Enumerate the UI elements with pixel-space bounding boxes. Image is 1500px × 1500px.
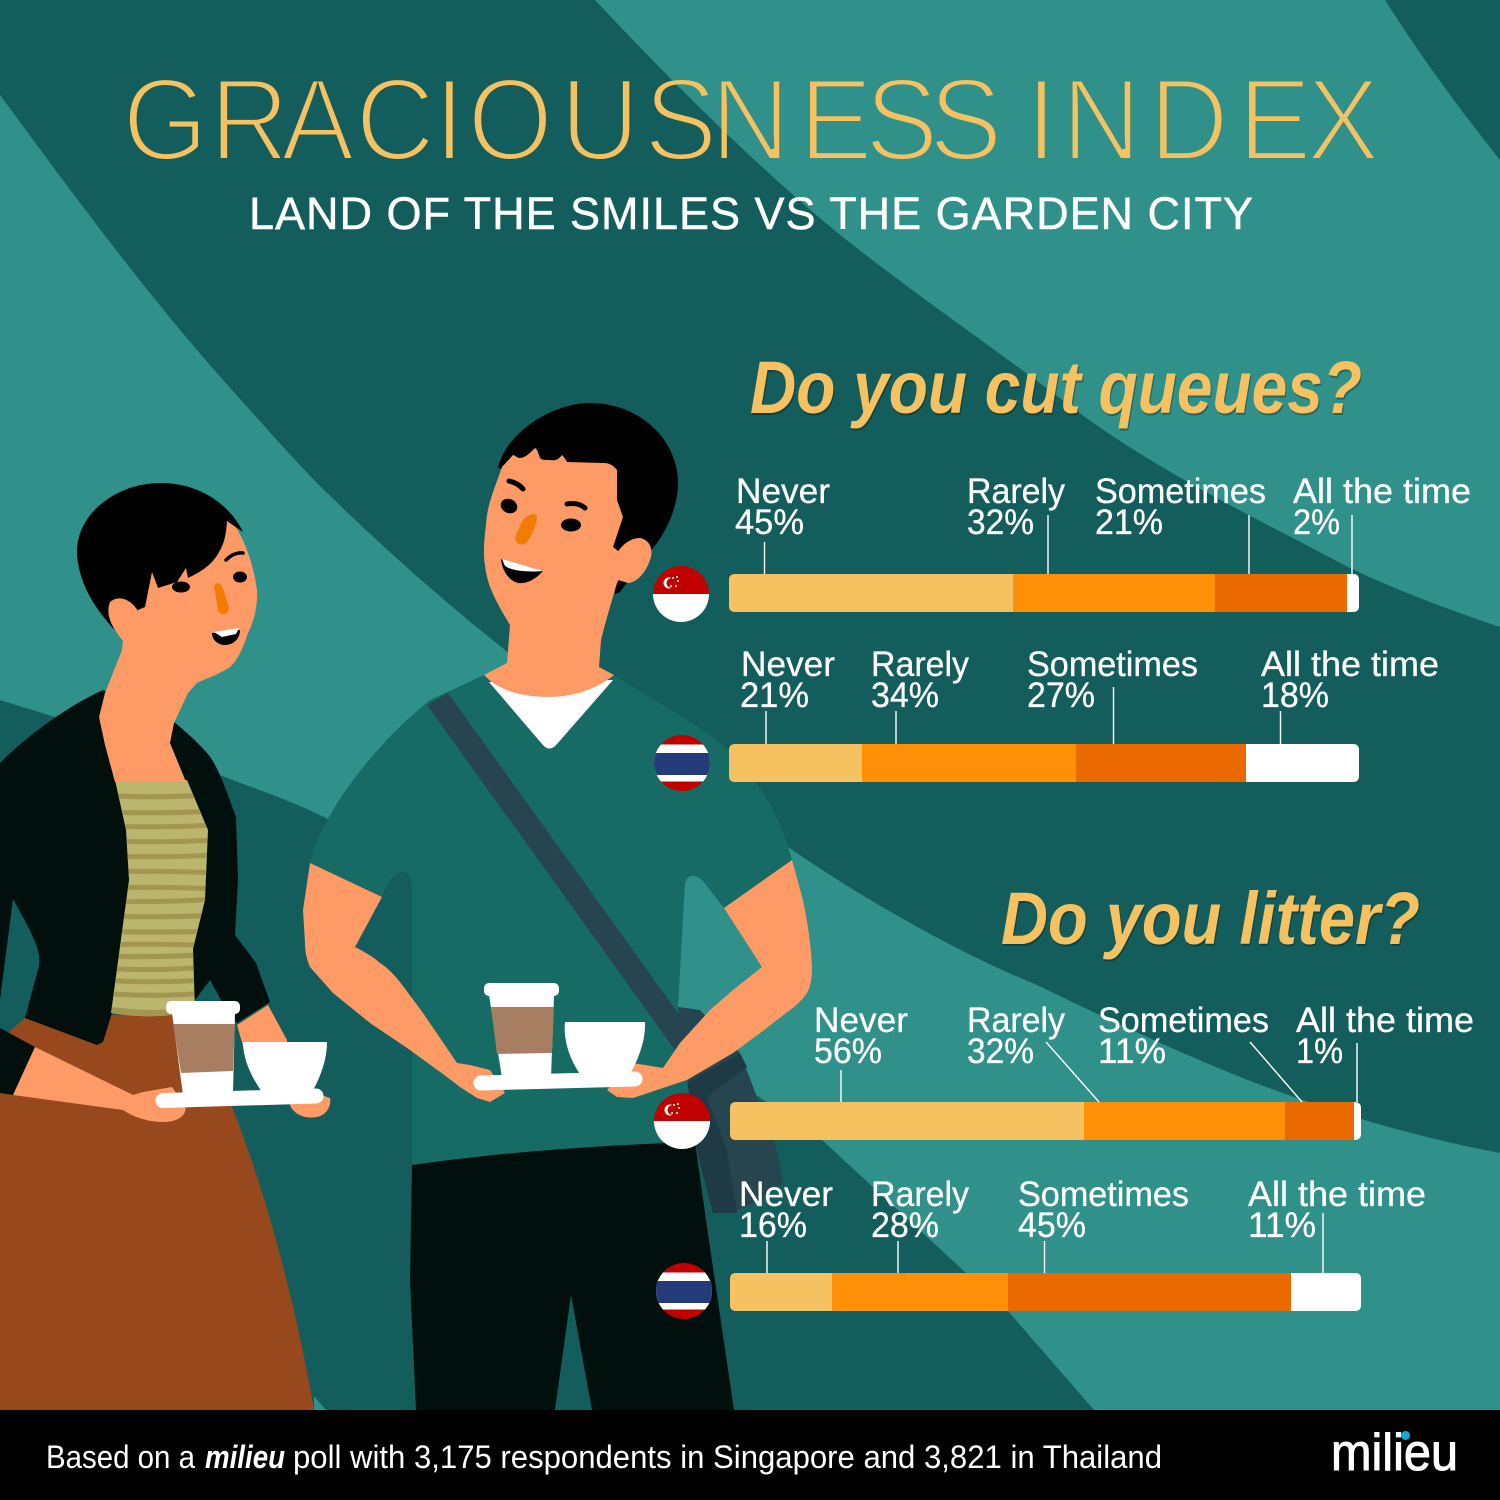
nose bbox=[214, 583, 229, 614]
mouth bbox=[501, 559, 543, 583]
face and neck bbox=[484, 448, 630, 697]
ear bbox=[108, 598, 138, 642]
eyes and brows bbox=[498, 481, 585, 532]
shirt bbox=[310, 675, 792, 1165]
right arm bbox=[237, 1005, 330, 1118]
chart: cut queues Singapore: All the time bbox=[1293, 472, 1471, 511]
footer source note: poll with 3,175 respondents in Singapore and 3,821 in Thailand bbox=[293, 1439, 1162, 1475]
mouth bbox=[212, 628, 240, 645]
ear bbox=[617, 538, 652, 583]
skirt bbox=[0, 1015, 314, 1410]
flag: Singapore row 1 bbox=[653, 566, 709, 622]
illustration: coffee tray woman bbox=[163, 1001, 327, 1100]
footer bar bbox=[0, 1410, 1500, 1500]
illustration: woman bbox=[0, 483, 330, 1410]
chart: cut queues Singapore: Rarely bbox=[967, 472, 1065, 511]
chart: litter Singapore bbox=[730, 1001, 1474, 1140]
chart: cut queues Thailand: Rarely bbox=[871, 645, 969, 684]
chart: cut queues Thailand: 21% bbox=[740, 676, 809, 715]
bag strap bbox=[427, 693, 700, 1060]
chart: cut queues Singapore bbox=[729, 472, 1471, 612]
chart: litter Thailand: 45% bbox=[1018, 1206, 1086, 1245]
illustration: man bbox=[303, 403, 812, 1410]
hair bbox=[498, 403, 678, 594]
chart: litter Thailand: All the time bbox=[1248, 1175, 1426, 1214]
left arm bbox=[303, 863, 505, 1102]
nose bbox=[515, 514, 537, 545]
chart: cut queues Singapore: Never bbox=[736, 472, 830, 511]
jacket bbox=[0, 690, 270, 1095]
logo: milieu: milieu bbox=[1331, 1424, 1458, 1482]
footer source note: Based on a bbox=[46, 1439, 195, 1475]
chart: cut queues Thailand: 18% bbox=[1261, 676, 1329, 715]
chart: litter Singapore: Rarely bbox=[967, 1001, 1065, 1040]
chart: cut queues Thailand: 34% bbox=[871, 676, 939, 715]
chart: litter Singapore: 11% bbox=[1098, 1032, 1166, 1071]
chart: cut queues Singapore: 2% bbox=[1293, 503, 1340, 542]
chart: cut queues Thailand: Sometimes bbox=[1027, 645, 1198, 684]
hair bbox=[77, 483, 243, 640]
chart: litter Singapore: Never bbox=[814, 1001, 908, 1040]
chart: litter Singapore: All the time bbox=[1296, 1001, 1474, 1040]
chart: cut queues Singapore: Sometimes bbox=[1095, 472, 1266, 511]
chart: litter Thailand bbox=[730, 1175, 1426, 1311]
subtitle: LAND OF THE SMILES VS THE GARDEN CITY bbox=[249, 188, 1253, 239]
eyes and brow bbox=[172, 553, 247, 592]
chart: litter Thailand: Never bbox=[739, 1175, 833, 1214]
illustration: coffee tray man bbox=[481, 983, 645, 1083]
flag: Singapore row 3 bbox=[654, 1093, 710, 1149]
face and neck bbox=[99, 515, 257, 782]
right arm bbox=[607, 860, 812, 1098]
chart: litter Thailand: Rarely bbox=[871, 1175, 969, 1214]
title: GRACIOUSNESS INDEX bbox=[122, 55, 1380, 186]
chart: litter Singapore: 1% bbox=[1296, 1032, 1343, 1071]
chart: litter Thailand: 11% bbox=[1248, 1206, 1316, 1245]
chart: cut queues Singapore: 32% bbox=[967, 503, 1034, 542]
striped top bbox=[111, 780, 208, 1016]
footer source note: milieu bbox=[205, 1439, 285, 1475]
chart: cut queues Thailand: Never bbox=[741, 645, 835, 684]
flag: Thailand row 4 bbox=[656, 1263, 712, 1319]
chart: litter Thailand: 16% bbox=[739, 1206, 807, 1245]
trousers bbox=[410, 1142, 734, 1410]
heading: litter: Do you litter? bbox=[1001, 877, 1420, 960]
white undershirt bbox=[489, 680, 613, 748]
chart: litter Thailand: Sometimes bbox=[1018, 1175, 1189, 1214]
chart: cut queues Singapore: 21% bbox=[1095, 503, 1163, 542]
chart: cut queues Thailand bbox=[729, 645, 1439, 782]
chart: litter Singapore: 56% bbox=[814, 1032, 882, 1071]
chart: cut queues Thailand: 27% bbox=[1027, 676, 1095, 715]
flag: Thailand row 2 bbox=[654, 735, 710, 791]
heading: cut queues: Do you cut queues? bbox=[750, 346, 1362, 429]
chart: cut queues Thailand: All the time bbox=[1261, 645, 1439, 684]
chart: litter Singapore: Sometimes bbox=[1098, 1001, 1269, 1040]
bag bbox=[678, 1007, 783, 1213]
left arm bbox=[13, 1047, 186, 1122]
chart: litter Singapore: 32% bbox=[967, 1032, 1034, 1071]
chart: cut queues Singapore: 45% bbox=[735, 503, 804, 542]
chart: litter Thailand: 28% bbox=[871, 1206, 939, 1245]
